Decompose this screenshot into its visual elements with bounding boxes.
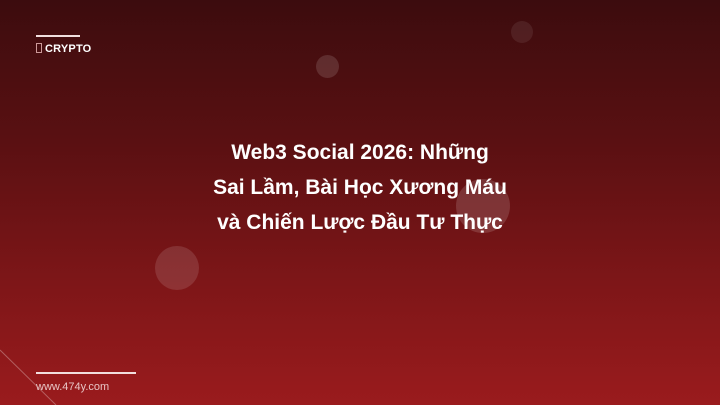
title bbox=[213, 141, 507, 234]
category label: CRYPTO bbox=[45, 43, 91, 55]
title: Sai Lầm, Bài Học Xương Máu bbox=[213, 176, 507, 199]
footer: website: www.474y.com bbox=[36, 381, 109, 393]
category label bbox=[36, 35, 91, 55]
title: Web3 Social 2026: Những bbox=[231, 141, 489, 164]
title: và Chiến Lược Đầu Tư Thực bbox=[217, 211, 503, 234]
